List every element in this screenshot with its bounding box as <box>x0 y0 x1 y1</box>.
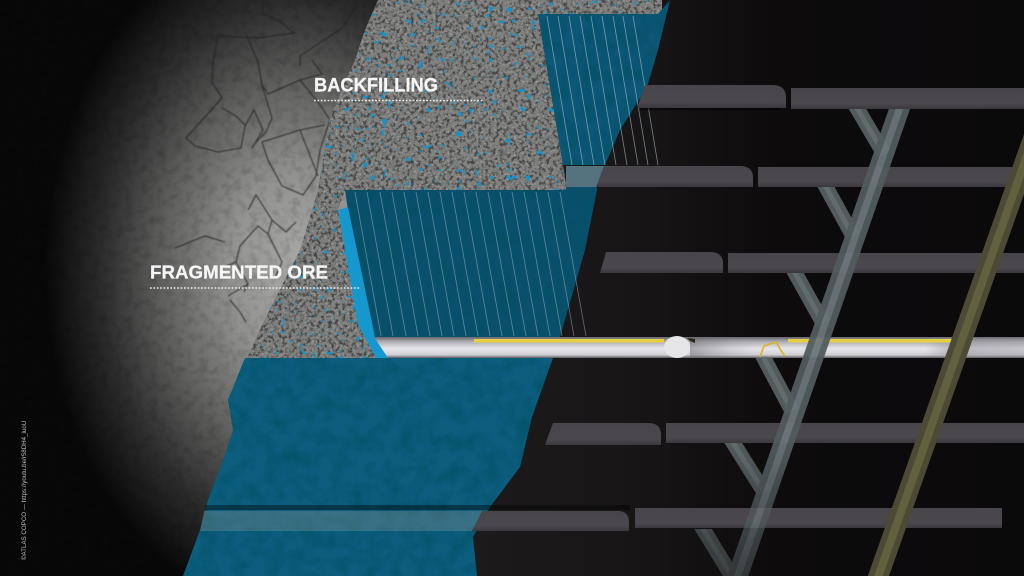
main ramp highlight <box>737 90 906 576</box>
main ramp body <box>737 90 906 576</box>
stope texture <box>189 4 669 576</box>
drift level 2 <box>566 166 1012 190</box>
lower blue stope <box>183 358 553 576</box>
drift level 1 <box>637 85 1024 110</box>
vehicle marker <box>687 338 695 343</box>
blue specks in backfill <box>262 0 654 358</box>
shaft highlight <box>877 130 1024 576</box>
drill hole lines: upper stope <box>547 16 658 165</box>
excavator icon <box>760 342 785 357</box>
decline ramp system <box>697 90 906 576</box>
label: backfilling: BACKFILLING <box>314 76 438 96</box>
blue stopes <box>183 0 670 576</box>
main ramp <box>737 90 906 576</box>
backfill and fragmented ore <box>240 0 680 370</box>
pipe right shading <box>925 338 1024 357</box>
drift level 5 <box>545 423 1024 445</box>
yellow rail <box>474 339 664 342</box>
upper blue stope <box>538 0 670 165</box>
haulage pipe <box>374 336 1024 358</box>
shaft body <box>877 130 1024 576</box>
olive shaft <box>877 130 1024 576</box>
middle blue stope <box>345 190 597 337</box>
vehicle circle <box>664 336 690 358</box>
bright blue ore strip <box>338 207 390 358</box>
branch bodies <box>697 98 884 576</box>
branch highlights <box>697 98 884 576</box>
drift level 3 <box>600 252 1024 273</box>
drill hole lines: middle stope <box>355 192 586 336</box>
branch connectors <box>697 98 884 576</box>
drift level 6 <box>200 505 1002 531</box>
credit text: ©ATLAS COPCO — https://youtu.be/r58DH4_iuoU <box>21 421 28 560</box>
dark host rock <box>400 0 1024 576</box>
yellow rail right <box>788 339 952 342</box>
rock cracks <box>175 0 360 322</box>
label: fragmented ore: FRAGMENTED ORE <box>150 262 328 282</box>
grey rock face <box>62 0 378 552</box>
pipe shading <box>690 338 760 357</box>
